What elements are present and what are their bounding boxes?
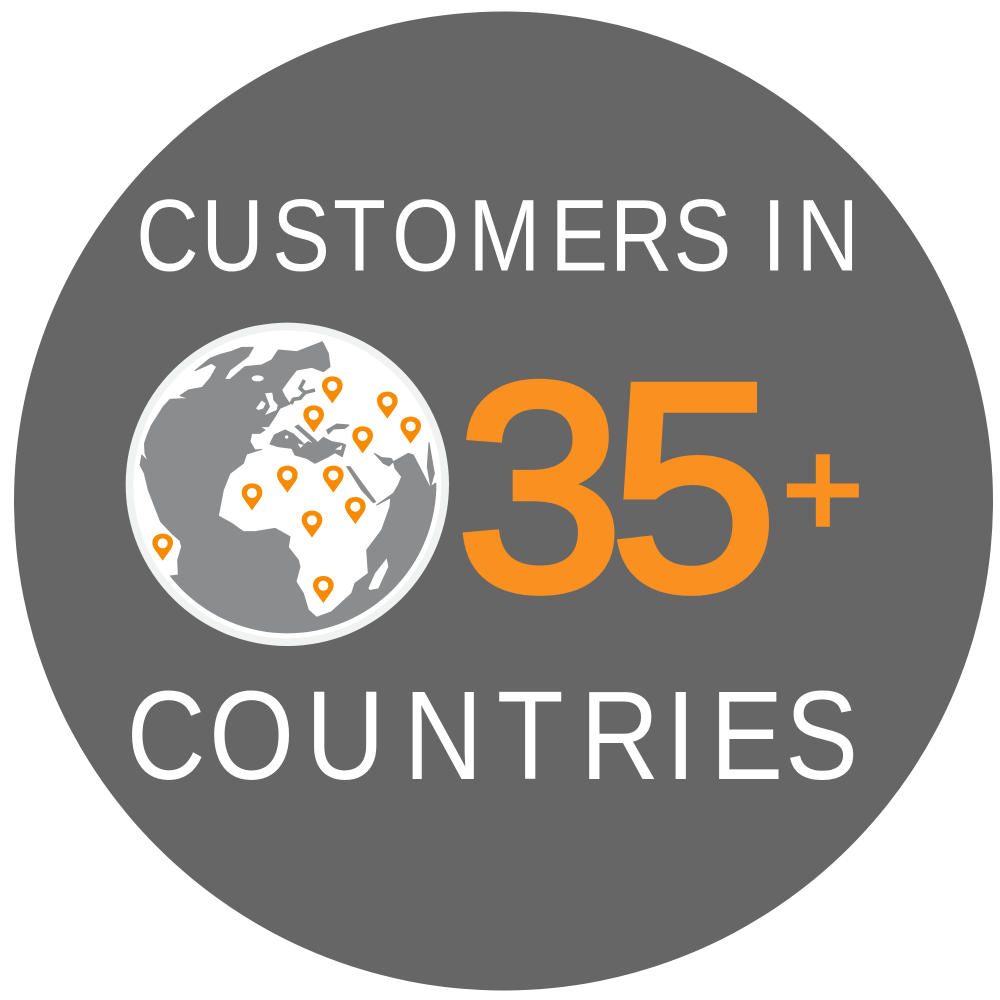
pin: South America xyxy=(152,534,173,561)
pin: north Africa east xyxy=(323,466,344,493)
plus sign: + xyxy=(782,410,864,567)
pin: Turkey region xyxy=(352,426,373,453)
heading: customers in: CUSTOMERS IN xyxy=(136,179,859,293)
pin: southern Africa xyxy=(313,576,334,603)
Black sea xyxy=(327,424,349,434)
Bay of Bengal xyxy=(427,443,434,487)
Red sea xyxy=(347,467,376,503)
pin: central Africa xyxy=(302,511,322,538)
pin: central Asia xyxy=(400,417,421,444)
heading: countries: COUNTRIES xyxy=(126,666,858,807)
big number: 35: 35 xyxy=(456,322,777,651)
globe outer ring xyxy=(126,323,449,646)
pin: east Africa xyxy=(345,497,366,524)
Mediterranean sea xyxy=(270,430,346,463)
pin: north Africa west xyxy=(277,466,298,493)
oceans xyxy=(140,342,448,643)
location pins xyxy=(152,376,421,603)
Adriatic sea xyxy=(295,425,318,445)
Baltic sea xyxy=(291,380,315,404)
globe land base xyxy=(133,330,441,638)
Persian gulf xyxy=(374,453,393,466)
pin: central Europe xyxy=(303,405,324,432)
land: islands xyxy=(252,375,388,590)
pin: northern Europe xyxy=(322,376,343,403)
pin: Russia xyxy=(377,392,398,419)
pin: west Africa xyxy=(242,483,262,510)
icon: globe with location pins xyxy=(126,323,449,646)
Southeast ocean edge xyxy=(430,482,436,496)
